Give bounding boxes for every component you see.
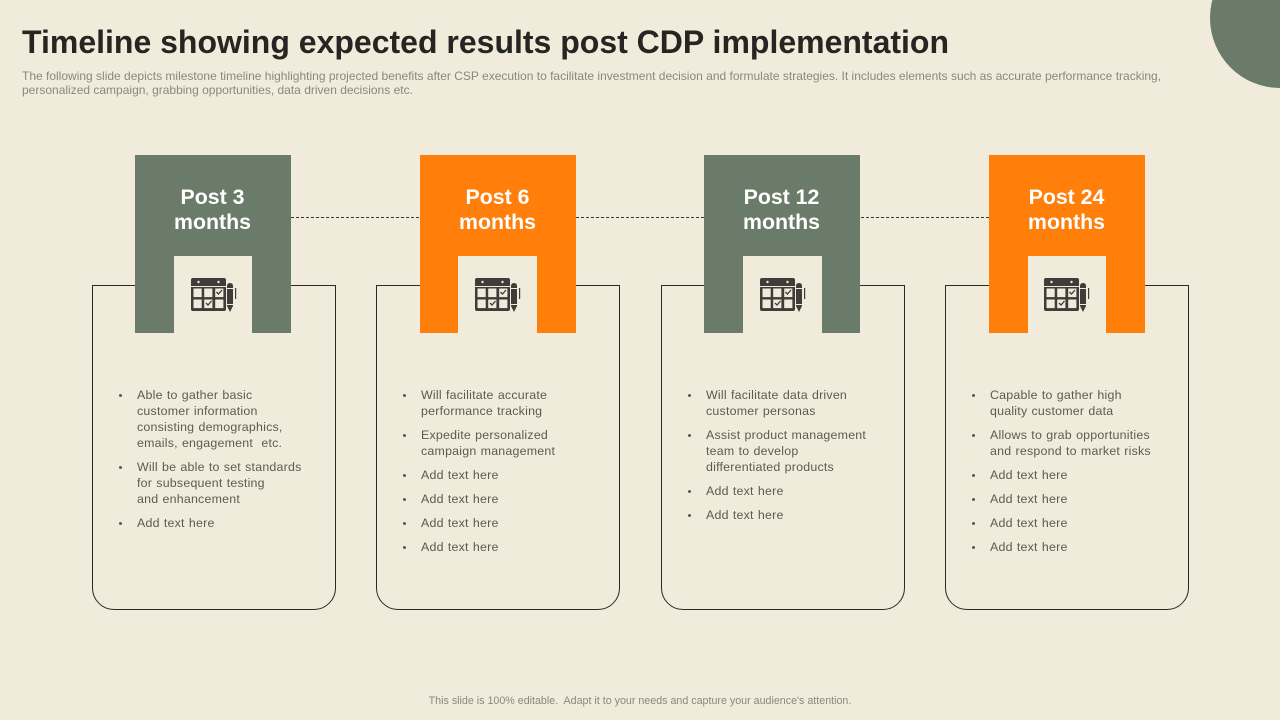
bullet list: Able to gather basic [137, 388, 252, 402]
card outline [92, 285, 336, 610]
heading: months [1028, 210, 1105, 234]
icon: calendar and pen [475, 278, 520, 312]
bullet list: Add text here [421, 540, 499, 554]
heading [1028, 185, 1105, 234]
icon backing [458, 256, 537, 334]
bullet list: consisting demographics, [137, 420, 283, 434]
title: Timeline showing expected results post CDP implementation [22, 24, 949, 60]
heading: months [174, 210, 251, 234]
icon: calendar and pen [760, 278, 806, 312]
subtitle description: The following slide depicts milestone timeline highlighting projected benefits after CSP execution to facilitate investment decision and formulate strategies. It includes elements such as accurate performance tracking, [22, 69, 1161, 83]
bullet list: customer information [137, 404, 258, 418]
card outline [661, 285, 905, 610]
footer note: This slide is 100% editable. Adapt it to your needs and capture your audience's attention. [429, 695, 851, 707]
bullet list: Add text here [421, 492, 499, 506]
icon backing [1028, 256, 1106, 334]
panel: post 6 months [376, 155, 620, 610]
heading: months [459, 210, 536, 234]
bullet list: and enhancement [137, 492, 240, 506]
heading: Post 3 [181, 185, 244, 209]
icon backing [743, 256, 822, 334]
heading: Post 12 [744, 185, 819, 209]
bullet list: Add text here [706, 508, 784, 522]
heading: Post 24 [1029, 185, 1104, 209]
heading: months [743, 210, 820, 234]
heading: Post 6 [466, 185, 529, 209]
bullet list: Will facilitate accurate [421, 388, 547, 402]
bullet list: performance tracking [421, 404, 542, 418]
bullet list: Add text here [421, 516, 499, 530]
bullet list: Add text here [706, 484, 784, 498]
bullet list: team to develop [706, 444, 798, 458]
bullet list: Assist product management [706, 428, 866, 442]
bullet list: emails, engagement etc. [137, 436, 282, 450]
bullet list [688, 388, 866, 522]
decorative corner circle [1210, 0, 1280, 88]
bullet list: customer personas [706, 404, 816, 418]
header tab: post 12 months [704, 155, 860, 333]
panel: post 24 months [945, 155, 1189, 610]
bullet list: Add text here [990, 540, 1068, 554]
bullet list [119, 388, 302, 530]
bullet list: Add text here [990, 468, 1068, 482]
bullet list: Add text here [421, 468, 499, 482]
panel: post 12 months [661, 155, 905, 610]
bullet list: differentiated products [706, 460, 834, 474]
bullet list: Add text here [990, 492, 1068, 506]
icon: calendar and pen [191, 278, 236, 312]
card outline [376, 285, 620, 610]
icon: calendar and pen [1044, 278, 1090, 312]
bullet list: Allows to grab opportunities [990, 428, 1150, 442]
header tab: post 3 months [135, 155, 291, 333]
heading [459, 185, 536, 234]
bullet list: quality customer data [990, 404, 1113, 418]
bullet list [972, 388, 1151, 554]
subtitle description [22, 69, 1161, 97]
bullet list: Add text here [990, 516, 1068, 530]
header tab: post 24 months [989, 155, 1145, 333]
bullet list: Will be able to set standards [137, 460, 302, 474]
bullet list: for subsequent testing [137, 476, 265, 490]
card outline [945, 285, 1189, 610]
dashed timeline connector [291, 217, 989, 218]
bullet list [403, 388, 555, 554]
heading [174, 185, 251, 234]
header tab: post 6 months [420, 155, 576, 333]
panel: post 3 months [92, 155, 336, 610]
heading [743, 185, 820, 234]
bullet list: Capable to gather high [990, 388, 1122, 402]
bullet list: campaign management [421, 444, 555, 458]
bullet list: Will facilitate data driven [706, 388, 847, 402]
icon backing [174, 256, 252, 334]
bullet list: Expedite personalized [421, 428, 548, 442]
bullet list: Add text here [137, 516, 215, 530]
subtitle description: personalized campaign, grabbing opportunities, data driven decisions etc. [22, 83, 413, 97]
bullet list: and respond to market risks [990, 444, 1151, 458]
